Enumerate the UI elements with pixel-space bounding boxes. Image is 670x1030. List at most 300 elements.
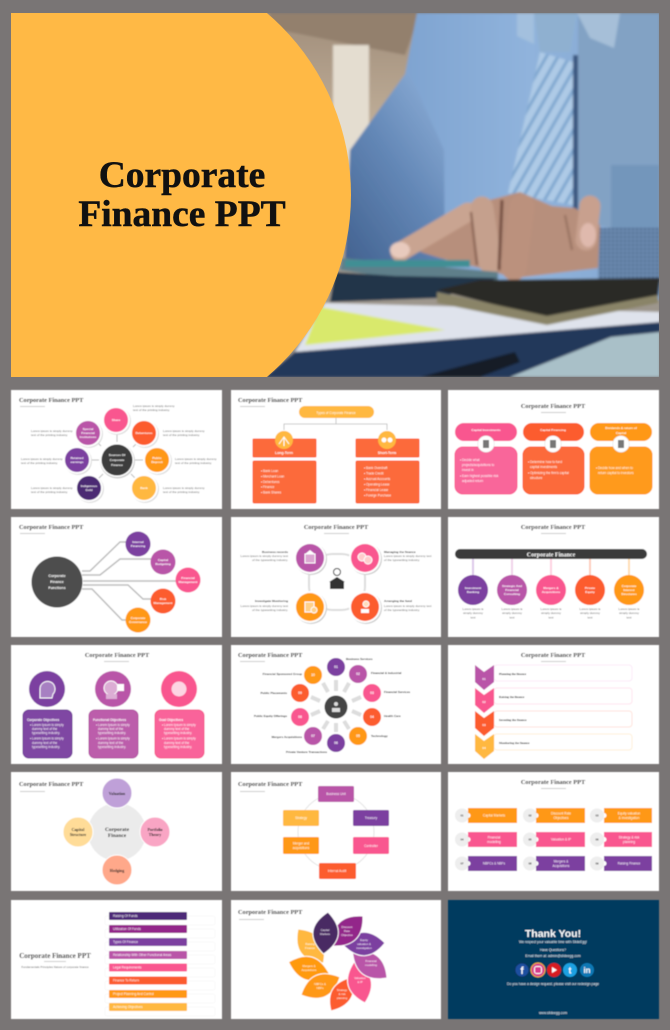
column: Corporate Objectives: Corporate Objectives (27, 718, 59, 722)
column: Goal Objectives (155, 671, 204, 758)
list: short-term sources (356, 461, 419, 503)
tag row 3 (468, 856, 652, 871)
slide 10: corporate finance cross diagram (11, 772, 222, 891)
petal: Discount rate objectives (332, 916, 363, 946)
captions: simply dummy (580, 611, 600, 615)
branch: Long-Term: Long-Term (275, 451, 293, 455)
node: Internal Financing: Internal (132, 540, 144, 544)
step 04 (475, 734, 632, 759)
caption: bottom left: Investigate Monitoring (255, 599, 288, 603)
numbered nodes: 10 (311, 673, 315, 677)
centre circle (88, 803, 146, 861)
icon: central building (329, 568, 345, 589)
list: long-term sources (253, 461, 316, 503)
column: Functional Objectives: Functional Objectives (93, 718, 126, 722)
node: Indigenous Gold: Gold (85, 488, 93, 492)
column: Goal Objectives: • Lorem Ipsum is simply (162, 736, 196, 740)
hub circle (32, 556, 82, 608)
circle: Corporate Interest Structures: Structures (621, 592, 637, 596)
box: Strategy (283, 810, 319, 826)
dark header bar (455, 549, 647, 559)
heading: Corporate Finance PPT (521, 779, 586, 786)
circle: Capital Structure: Capital (72, 827, 85, 832)
list: short-term sources: • Operating Lease (364, 482, 390, 486)
lorem captions (21, 404, 217, 494)
heading: Corporate Finance PPT (85, 652, 150, 659)
heading: Corporate Finance PPT (521, 403, 586, 410)
tag row 2: Strategy & risk (619, 836, 640, 840)
slide 12: nine numbered tags: 02 (528, 814, 532, 818)
bar: Finance To Return (109, 976, 187, 984)
column: Corporate Objectives: • Lorem Ipsum is simply (30, 723, 64, 727)
hub circle (324, 696, 348, 718)
numbered nodes: 08 (298, 715, 302, 719)
thank you message: www.slideegg.com (539, 1011, 567, 1015)
petal: Equity valuation and investigation (343, 932, 385, 956)
node: Financial Management (176, 568, 200, 592)
slide 12: nine numbered tags: 07 (460, 862, 464, 866)
tag row 1: Objectives (554, 816, 569, 820)
node: Corporate Governance (126, 608, 150, 632)
petal: NBFCs and NBFs: NBFCs & (314, 982, 326, 986)
lorem captions: text of the printing industry. (31, 433, 68, 437)
step 03: Investing the finance (499, 718, 527, 722)
captions: text (470, 616, 476, 620)
tag row 2: Valuation & IP (551, 838, 571, 842)
box: Treasury (353, 810, 389, 826)
bar: Raising Of Funds (109, 912, 187, 920)
thank you heading: Thank You! (525, 928, 581, 940)
node: Public Deposit: Public (152, 456, 162, 460)
bar: Achieving Objectives: Achieving Objectives (113, 1005, 143, 1009)
node: Financial Management: Financial (181, 576, 195, 580)
social icons: in (583, 966, 591, 975)
box: Controller (353, 837, 389, 854)
petal: NBFCs and NBFs: NBFs (316, 986, 324, 990)
circle: Corporate Interest Structures (614, 575, 644, 605)
column: Capital Investments: invest in (462, 468, 474, 472)
column: Functional Objectives: • Lorem Ipsum is simply (96, 723, 130, 727)
circle: Valuation: Valuation (109, 791, 126, 796)
node labels (254, 657, 411, 754)
circle: Strategic and Financial Consulting: Financial (505, 588, 519, 592)
bar: Finance To Return: Finance To Return (113, 978, 139, 982)
slide 3: capital investments, financing, dividends columns (448, 390, 659, 509)
branch: Short-Term: Short-Term (378, 451, 396, 455)
caption: top right: Managing the finance (384, 550, 416, 554)
petal: Mergers and Acquisitions (288, 956, 330, 981)
list: long-term sources: • Bank Loan (261, 469, 278, 473)
heading block: Corporate Finance PPT (19, 952, 91, 960)
caption: top left: Lorem ipsum is simply dummy text (241, 554, 288, 558)
lorem captions: text of the printing industry. (175, 461, 212, 465)
circle: Portfolio Theory: Theory (149, 832, 161, 837)
tag row 3: Raising Finance (618, 862, 641, 866)
node: Internal Financing: Financing (131, 544, 145, 548)
petal: Strategy and risk planning: & risk (338, 992, 346, 996)
circle: Strategic and Financial Consulting: Consulting (504, 592, 520, 596)
hero slide: Corporate Finance PPT cover (11, 13, 659, 377)
bar: Utilization Of Funds: Utilization Of Funds (113, 927, 141, 931)
numbered nodes: 03 (370, 691, 374, 695)
column: Corporate Objectives: dummy text of the (32, 727, 58, 731)
column: Dividends and return of capital: return capital to investors (598, 471, 634, 475)
social icons (515, 963, 594, 977)
step 02: 02 (482, 700, 486, 704)
hub circle: Functions (48, 586, 66, 590)
node: Indigenous Gold: Indigenous (81, 484, 98, 488)
node: Indigenous Gold (75, 474, 104, 503)
petal: Valuation and IP: & IP (357, 980, 363, 984)
column: Capital Investments: projects/acquisitions to (462, 463, 494, 467)
column: Functional Objectives: typesetting industry. (98, 731, 126, 735)
column: Goal Objectives: typesetting industry. (164, 745, 192, 749)
bar: Utilization Of Funds (109, 925, 187, 933)
lorem captions: Lorem ipsum is simply dummy (163, 486, 205, 490)
circle: Mergers and Acquisitions: Acquisitions (542, 590, 561, 594)
step 04: Monitoring the finance (499, 741, 530, 745)
caption: top right: of the typesetting industry. (384, 558, 420, 562)
slide 14: pinwheel of petals (231, 900, 441, 1019)
branch: Short-Term (356, 431, 419, 457)
captions: Lorem ipsum is (541, 607, 562, 611)
list: short-term sources: • Trade Credit (364, 472, 384, 476)
thank you message: Have Questions? (540, 948, 566, 952)
petal: Strategy and risk planning (330, 977, 354, 1011)
slide 12: nine numbered tags: 01 (460, 814, 464, 818)
hub circle: Finance (50, 580, 64, 584)
circle: Corporate Interest Structures: Corporate (622, 584, 637, 588)
box: Controller: Controller (364, 844, 379, 848)
node: Debentures: Debentures (135, 431, 153, 435)
column: Functional Objectives (89, 671, 138, 758)
slide 5: four function circles around a finance icon (231, 517, 441, 637)
numbered nodes: 06 (334, 741, 338, 745)
tag row 3: Mergers & (554, 860, 569, 864)
thank you message: We respect your valuable time with SlideEgg! (519, 940, 587, 944)
slide 12: nine numbered tags: 05 (528, 838, 532, 842)
column: Capital Investments: • Earn highest possible risk (460, 474, 499, 478)
caption: top right (384, 550, 432, 562)
slide 12: nine numbered tags: 08 (528, 862, 532, 866)
node: Special financial institutions (74, 419, 103, 448)
captions: text (626, 616, 632, 620)
node labels: Public Placements (260, 691, 287, 695)
box: Treasury: Treasury (365, 816, 378, 820)
column: Functional Objectives: typesetting industry. (98, 745, 126, 749)
list: long-term sources: • Bank Shares (261, 490, 282, 494)
petal: Strategy and risk planning: planning (337, 996, 348, 1000)
box: Internal Audit: Internal Audit (328, 869, 346, 873)
petal: Equity valuation and investigation: investigation (356, 946, 372, 950)
circle: Mergers and Acquisitions: Mergers & (543, 586, 559, 590)
captions: Lorem ipsum is (580, 607, 601, 611)
circle: Portfolio Theory: Portfolio (147, 827, 163, 832)
node: Risk Management: Management (154, 601, 172, 605)
bar: Achieving Objectives (109, 1003, 187, 1011)
node: Special financial institutions: Financial (81, 431, 95, 435)
node: Bank: Bank (140, 486, 148, 490)
slide 6: corporate finance bar with five circles (448, 517, 659, 637)
petal: Strategy and risk planning: Strategy (337, 988, 348, 992)
hub circle: Corporate (110, 458, 125, 462)
heading: Corporate Finance PPT (19, 524, 84, 531)
circle: Private Equity: Private (585, 586, 595, 590)
petal: Discount rate objectives: Rate (344, 929, 350, 933)
node labels: Financial & Industrial (371, 671, 402, 675)
column: Capital Investments (455, 423, 517, 494)
list: short-term sources: • Foreign Purchase (364, 494, 391, 498)
step 02: Raising the finance (499, 695, 525, 699)
petal: Raising Finance: Finance (305, 946, 315, 950)
node: Share (102, 406, 131, 435)
heading: Corporate Finance PPT (19, 397, 84, 404)
heading: Corporate Finance PPT (238, 781, 303, 788)
column: Goal Objectives: dummy text of the (164, 727, 190, 731)
lorem captions: Lorem ipsum is simply dummy (31, 429, 73, 433)
column: Dividends and return of capital: Capital (616, 431, 626, 435)
column: Functional Objectives: • Lorem Ipsum is simply (96, 736, 130, 740)
title (78, 162, 286, 226)
captions: text (588, 616, 593, 620)
captions: Lorem ipsum is (619, 607, 640, 611)
column: Functional Objectives: dummy text of the (98, 741, 124, 745)
box: Business Unit: Business Unit (326, 792, 346, 796)
circle: Private Equity (575, 575, 605, 605)
captions: Lorem ipsum is (463, 607, 484, 611)
petal: Raising Finance: Raising (305, 942, 315, 946)
bar: Legal Requirements: Legal Requirements (113, 966, 142, 970)
number badges (455, 808, 604, 870)
captions: simply dummy (463, 611, 483, 615)
numbered nodes: 02 (356, 672, 360, 676)
petal: Financial modelling: Financial (365, 959, 377, 963)
petal: Valuation and IP (347, 962, 372, 1003)
root pill (299, 406, 374, 418)
caption: bottom left: of the typesetting industry. (252, 608, 288, 612)
petal: Mergers and Acquisitions: Mergers & (303, 964, 316, 968)
node labels: Public Equity Offerings (254, 714, 287, 718)
slide 4: corporate finance functions branching diagram (11, 517, 222, 637)
column: Goal Objectives: • Lorem Ipsum is simply (162, 723, 196, 727)
heading: Corporate Finance PPT (521, 524, 586, 531)
node: Special financial institutions: Institutions (80, 435, 97, 439)
numbered nodes: 01 (334, 665, 338, 669)
pale backing rows (105, 916, 215, 1016)
node: Retained earnings: earnings (71, 460, 84, 464)
list: short-term sources: • Bank Overdraft (364, 466, 388, 470)
bar: Project Planning And Control (109, 990, 187, 998)
column: Corporate Objectives: typesetting industry. (32, 731, 60, 735)
node: Retained earnings: Retained (70, 456, 84, 460)
circle: Strategic and Financial Consulting (497, 575, 527, 605)
numbered nodes: 04 (370, 715, 374, 719)
heading: Corporate Finance PPT (238, 909, 303, 916)
petal: Equity valuation and investigation: Equity (360, 938, 368, 942)
caption: top left: of the typesetting industry. (252, 558, 288, 562)
petal: Capital Markets (313, 912, 338, 954)
column: Corporate Objectives: typesetting industry. (32, 745, 60, 749)
petal: Equity valuation and investigation: valuation & (357, 942, 371, 946)
tag row 1: Equity valuation (618, 812, 640, 816)
node labels: Private Venture Transactions (286, 750, 327, 754)
lorem captions: text of the printing industry. (163, 490, 200, 494)
node: Risk Management: Risk (160, 597, 167, 601)
bar: Project Planning And Control: Project Planning And Control (113, 992, 154, 996)
node labels: Business Services (346, 657, 373, 661)
connecting ring (298, 794, 374, 870)
step 01 (475, 665, 632, 690)
circle: Strategic and Financial Consulting: Strategic And (502, 584, 522, 588)
column: Capital Financing (523, 423, 584, 494)
tag row 3: Acquisitions (552, 864, 570, 868)
slide 9: four chevron steps (448, 645, 659, 764)
numbered nodes (291, 658, 381, 752)
centre circle: Corporate (105, 827, 130, 833)
heading block: Fundamentals Principles Nature of corporate finance (21, 965, 89, 969)
captions: simply dummy (541, 611, 561, 615)
slide 11: six department boxes on a ring (231, 772, 441, 891)
lorem captions: Lorem ipsum is simply dummy (163, 429, 205, 433)
bar: Types Of Finance (109, 938, 187, 946)
caption: bottom left: Lorem ipsum is simply dummy text (241, 604, 288, 608)
column: Capital Investments: • Decide what (460, 458, 480, 462)
heading: Corporate Finance PPT (238, 652, 303, 659)
column: Functional Objectives: dummy text of the (98, 727, 124, 731)
column: Capital Financing: structure (530, 476, 543, 480)
petal: Financial modelling: modelling (365, 963, 377, 967)
thank you message: Do you have a design request, please visit our redesign page (507, 982, 599, 986)
heading: Corporate Finance PPT (304, 524, 369, 531)
column: Capital Financing: • Optimizing the firm's capital (528, 471, 569, 475)
node: Public Deposit (143, 446, 172, 475)
node labels: Financial Services (384, 690, 411, 694)
connector arrows (311, 680, 361, 732)
numbered nodes: 09 (298, 691, 302, 695)
caption: bottom right: Arranging the fund (384, 599, 412, 603)
hub circle: Sources Of (109, 453, 126, 457)
petal: Capital Markets: Capital (321, 928, 330, 932)
lorem captions: Lorem ipsum is simply dummy (133, 404, 175, 408)
petal: Capital Markets: Markets (320, 932, 331, 936)
node: Capital Budgeting: Budgeting (155, 562, 171, 566)
step 04: 04 (482, 746, 486, 750)
slide 7: objectives columns (11, 645, 222, 764)
node: Capital Budgeting (150, 550, 176, 574)
heading: Corporate Finance PPT (19, 781, 84, 788)
slide 12: nine numbered tags: 04 (460, 838, 464, 842)
lorem captions: Lorem ipsum is simply dummy (31, 486, 73, 490)
petal: NBFCs and NBFs (301, 974, 340, 998)
captions: simply dummy (619, 611, 639, 615)
caption: top left: Business records (262, 550, 288, 554)
heading: Corporate Finance PPT (521, 652, 586, 659)
step 03 (475, 711, 632, 736)
lorem captions: text of the printing industry. (21, 461, 58, 465)
slide 1: resources of corporate finance radial (11, 390, 222, 509)
numbered nodes: 05 (356, 734, 360, 738)
column: Corporate Objectives: dummy text of the (32, 741, 58, 745)
step 01: 01 (482, 677, 486, 681)
box: Internal Audit (319, 863, 356, 879)
centre circle: Finance (108, 833, 127, 839)
node: Debentures (130, 419, 159, 448)
circle: Valuation (102, 778, 132, 808)
captions: text (510, 616, 515, 620)
node: Corporate Governance: Governance (129, 620, 147, 624)
node labels: Mergers Acquisitions (272, 735, 302, 739)
slide 15: thank you (448, 900, 659, 1019)
slide 12: nine numbered tags: 09 (595, 862, 599, 866)
node: Special financial institutions: Special (83, 427, 94, 431)
bar: Types Of Finance: Types Of Finance (113, 940, 138, 944)
social icons: f (520, 966, 524, 977)
numbered nodes: 07 (311, 734, 315, 738)
circle: Portfolio Theory (140, 817, 170, 847)
connecting ring (309, 554, 365, 610)
column: Goal Objectives: typesetting industry. (164, 731, 192, 735)
circle: Investment Banking: Investment (465, 586, 481, 590)
box: Merger and acquisitions: Merger and (293, 842, 309, 846)
slide 13: eight stacked bars (11, 900, 222, 1019)
captions (463, 607, 640, 620)
hub circle: Corporate (48, 574, 66, 578)
tag row 1: & investigation (619, 816, 640, 820)
list: short-term sources: • Financial Lease (364, 488, 389, 492)
heading block (19, 952, 91, 969)
yellow title panel (11, 13, 351, 377)
circle: Hedging: Hedging (110, 868, 124, 873)
caption: top left (241, 550, 288, 562)
circle: Capital Structure: Structure (70, 832, 86, 837)
circle: Investment Banking (458, 575, 488, 605)
petal: Discount rate objectives: Discount (342, 925, 353, 929)
circle: Capital Structure (63, 817, 93, 847)
tag row 2: Financial (488, 836, 501, 840)
slide 12: nine numbered tags: 03 (595, 814, 599, 818)
hub circle (100, 443, 135, 478)
lorem captions: Lorem ipsum is simply dummy (21, 457, 63, 461)
hub circle: Finance (111, 463, 123, 467)
tag row 2: planning (623, 840, 635, 844)
captions: Lorem ipsum is (502, 607, 523, 611)
node: Retained earnings (63, 446, 92, 475)
root pill: Types of Corporate Finance (316, 411, 356, 415)
column: Dividends and return of capital (590, 423, 652, 494)
branch: Long-Term (253, 431, 316, 457)
column: Goal Objectives: Goal Objectives (159, 718, 183, 722)
caption: top right: Lorem ipsum is simply dummy text (384, 554, 432, 558)
node: Risk Management (150, 588, 176, 614)
caption: bottom right: of the typesetting industry. (384, 608, 420, 612)
box: Merger and acquisitions: acquisitions (293, 846, 310, 850)
list: short-term sources: • Accrual Accounts (364, 477, 391, 481)
column: Corporate Objectives: • Lorem Ipsum is simply (30, 736, 64, 740)
photo: businessman using a calculator (260, 13, 660, 377)
tag row 1: Discount Rate (551, 812, 571, 816)
circle: Hedging (102, 855, 132, 885)
circle: Investment Banking: Banking (467, 590, 479, 594)
slide 12: nine numbered tags: 06 (595, 838, 599, 842)
thank you message: Email them at: admin@slideegg.com (525, 954, 581, 958)
list: long-term sources: • Debentures (261, 480, 280, 484)
caption: bottom right (384, 599, 432, 612)
title: Finance PPT (78, 194, 286, 235)
node: Share: Share (112, 418, 121, 422)
box: Business Unit (318, 786, 354, 802)
lorem captions: text of the printing industry. (163, 433, 200, 437)
tag row 3: NBFCs & NBFs (483, 862, 505, 866)
